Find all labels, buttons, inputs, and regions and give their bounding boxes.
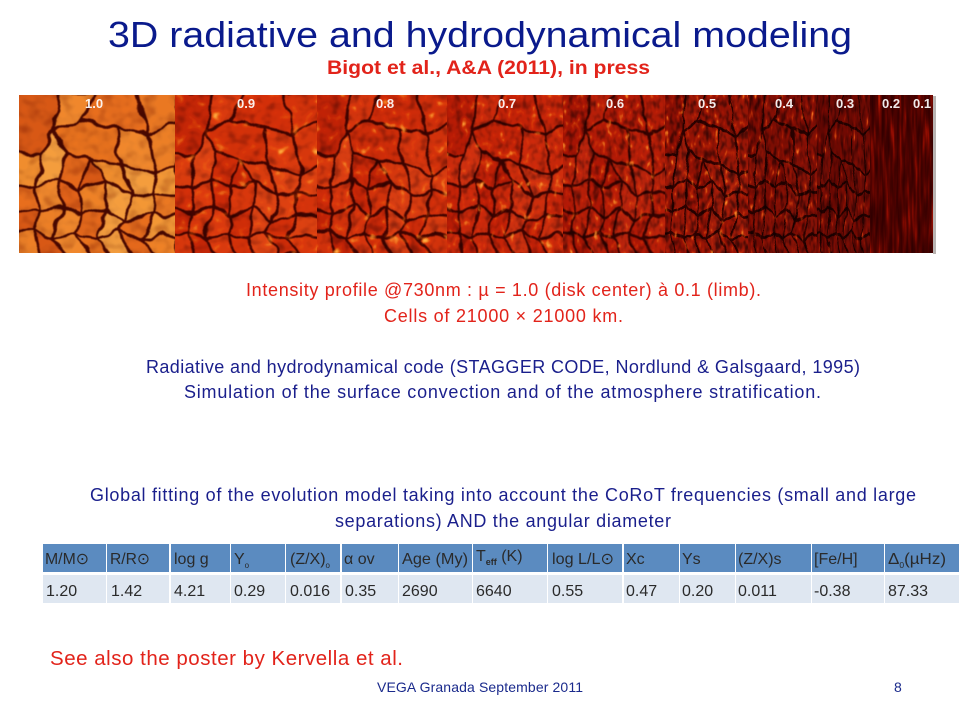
table header row: 0 [899,561,905,570]
table header row: Y [234,551,245,568]
granulation intensity image: 0.8 [376,96,394,111]
table header row: (Z/X) [290,551,326,568]
intensity profile text: Cells of 21000 × 21000 km. [384,306,623,326]
table header row: log L/L⊙ [552,551,614,568]
granulation intensity image: 0.6 [606,96,624,111]
title: 3D radiative and hydrodynamical modeling [108,14,852,55]
table data row: 1.20 [46,583,77,600]
table header row: Ys [682,551,701,568]
table data row: 0.20 [682,583,713,600]
poster note: See also the poster by Kervella et al. [50,647,403,670]
table header row: M/M⊙ [45,551,89,568]
table data row: 1.42 [111,583,142,600]
table header row: Xc [626,551,645,568]
table header row: [Fe/H] [814,551,858,568]
intensity profile text: Intensity profile @730nm : µ = 1.0 (disk center) à 0.1 (limb). [246,280,761,300]
table header row: T [476,548,486,565]
code description text [146,357,860,402]
table data row: 0.011 [738,583,777,600]
granulation intensity image: 0.1 [913,96,931,111]
table header row: log g [174,551,209,568]
table data row: 87.33 [888,583,928,600]
table header row: o [245,561,250,570]
table data row: 0.55 [552,583,583,600]
granulation intensity image: 1.0 [85,96,103,111]
table header row: eff [486,557,498,567]
table data row: 4.21 [174,583,205,600]
table data row: 6640 [476,583,512,600]
footer text: VEGA Granada September 2011 [377,679,583,695]
table data row: 0.35 [345,583,376,600]
table header row: (K) [497,548,523,565]
table data row: -0.38 [814,583,851,600]
table header row: Age (My) [402,551,468,568]
granulation intensity image: 0.4 [775,96,794,111]
granulation intensity image: 0.5 [698,96,716,111]
table header row: Δ [888,551,899,568]
citation: Bigot et al., A&A (2011), in press [327,58,650,79]
global fitting text: Global fitting of the evolution model taking into account the CoRoT frequencies (small and large [90,485,916,505]
parameter table [43,544,959,603]
table header row: (µHz) [904,551,946,568]
granulation intensity image: 0.9 [237,96,255,111]
global fitting text [90,485,916,531]
granulation intensity image: 0.3 [836,96,854,111]
table data row: 0.016 [290,583,330,600]
table data row: 2690 [402,583,438,600]
code description text: Simulation of the surface convection and of the atmosphere stratification. [184,382,821,402]
page number: 8 [894,679,902,695]
global fitting text: separations) AND the angular diameter [335,511,671,531]
table data row: 0.29 [234,583,265,600]
granulation intensity image: 0.7 [498,96,516,111]
code description text: Radiative and hydrodynamical code (STAGGER CODE, Nordlund & Galsgaard, 1995) [146,357,860,377]
table header row: (Z/X)s [738,551,782,568]
table header row: α ov [344,551,375,568]
table header row [43,544,959,572]
granulation intensity image: 0.2 [882,96,900,111]
table data row [43,575,959,603]
granulation intensity image [15,91,936,257]
table data row: 0.47 [626,583,657,600]
intensity profile text [246,280,761,326]
table header row: o [326,561,331,570]
table header row: R/R⊙ [110,551,150,568]
